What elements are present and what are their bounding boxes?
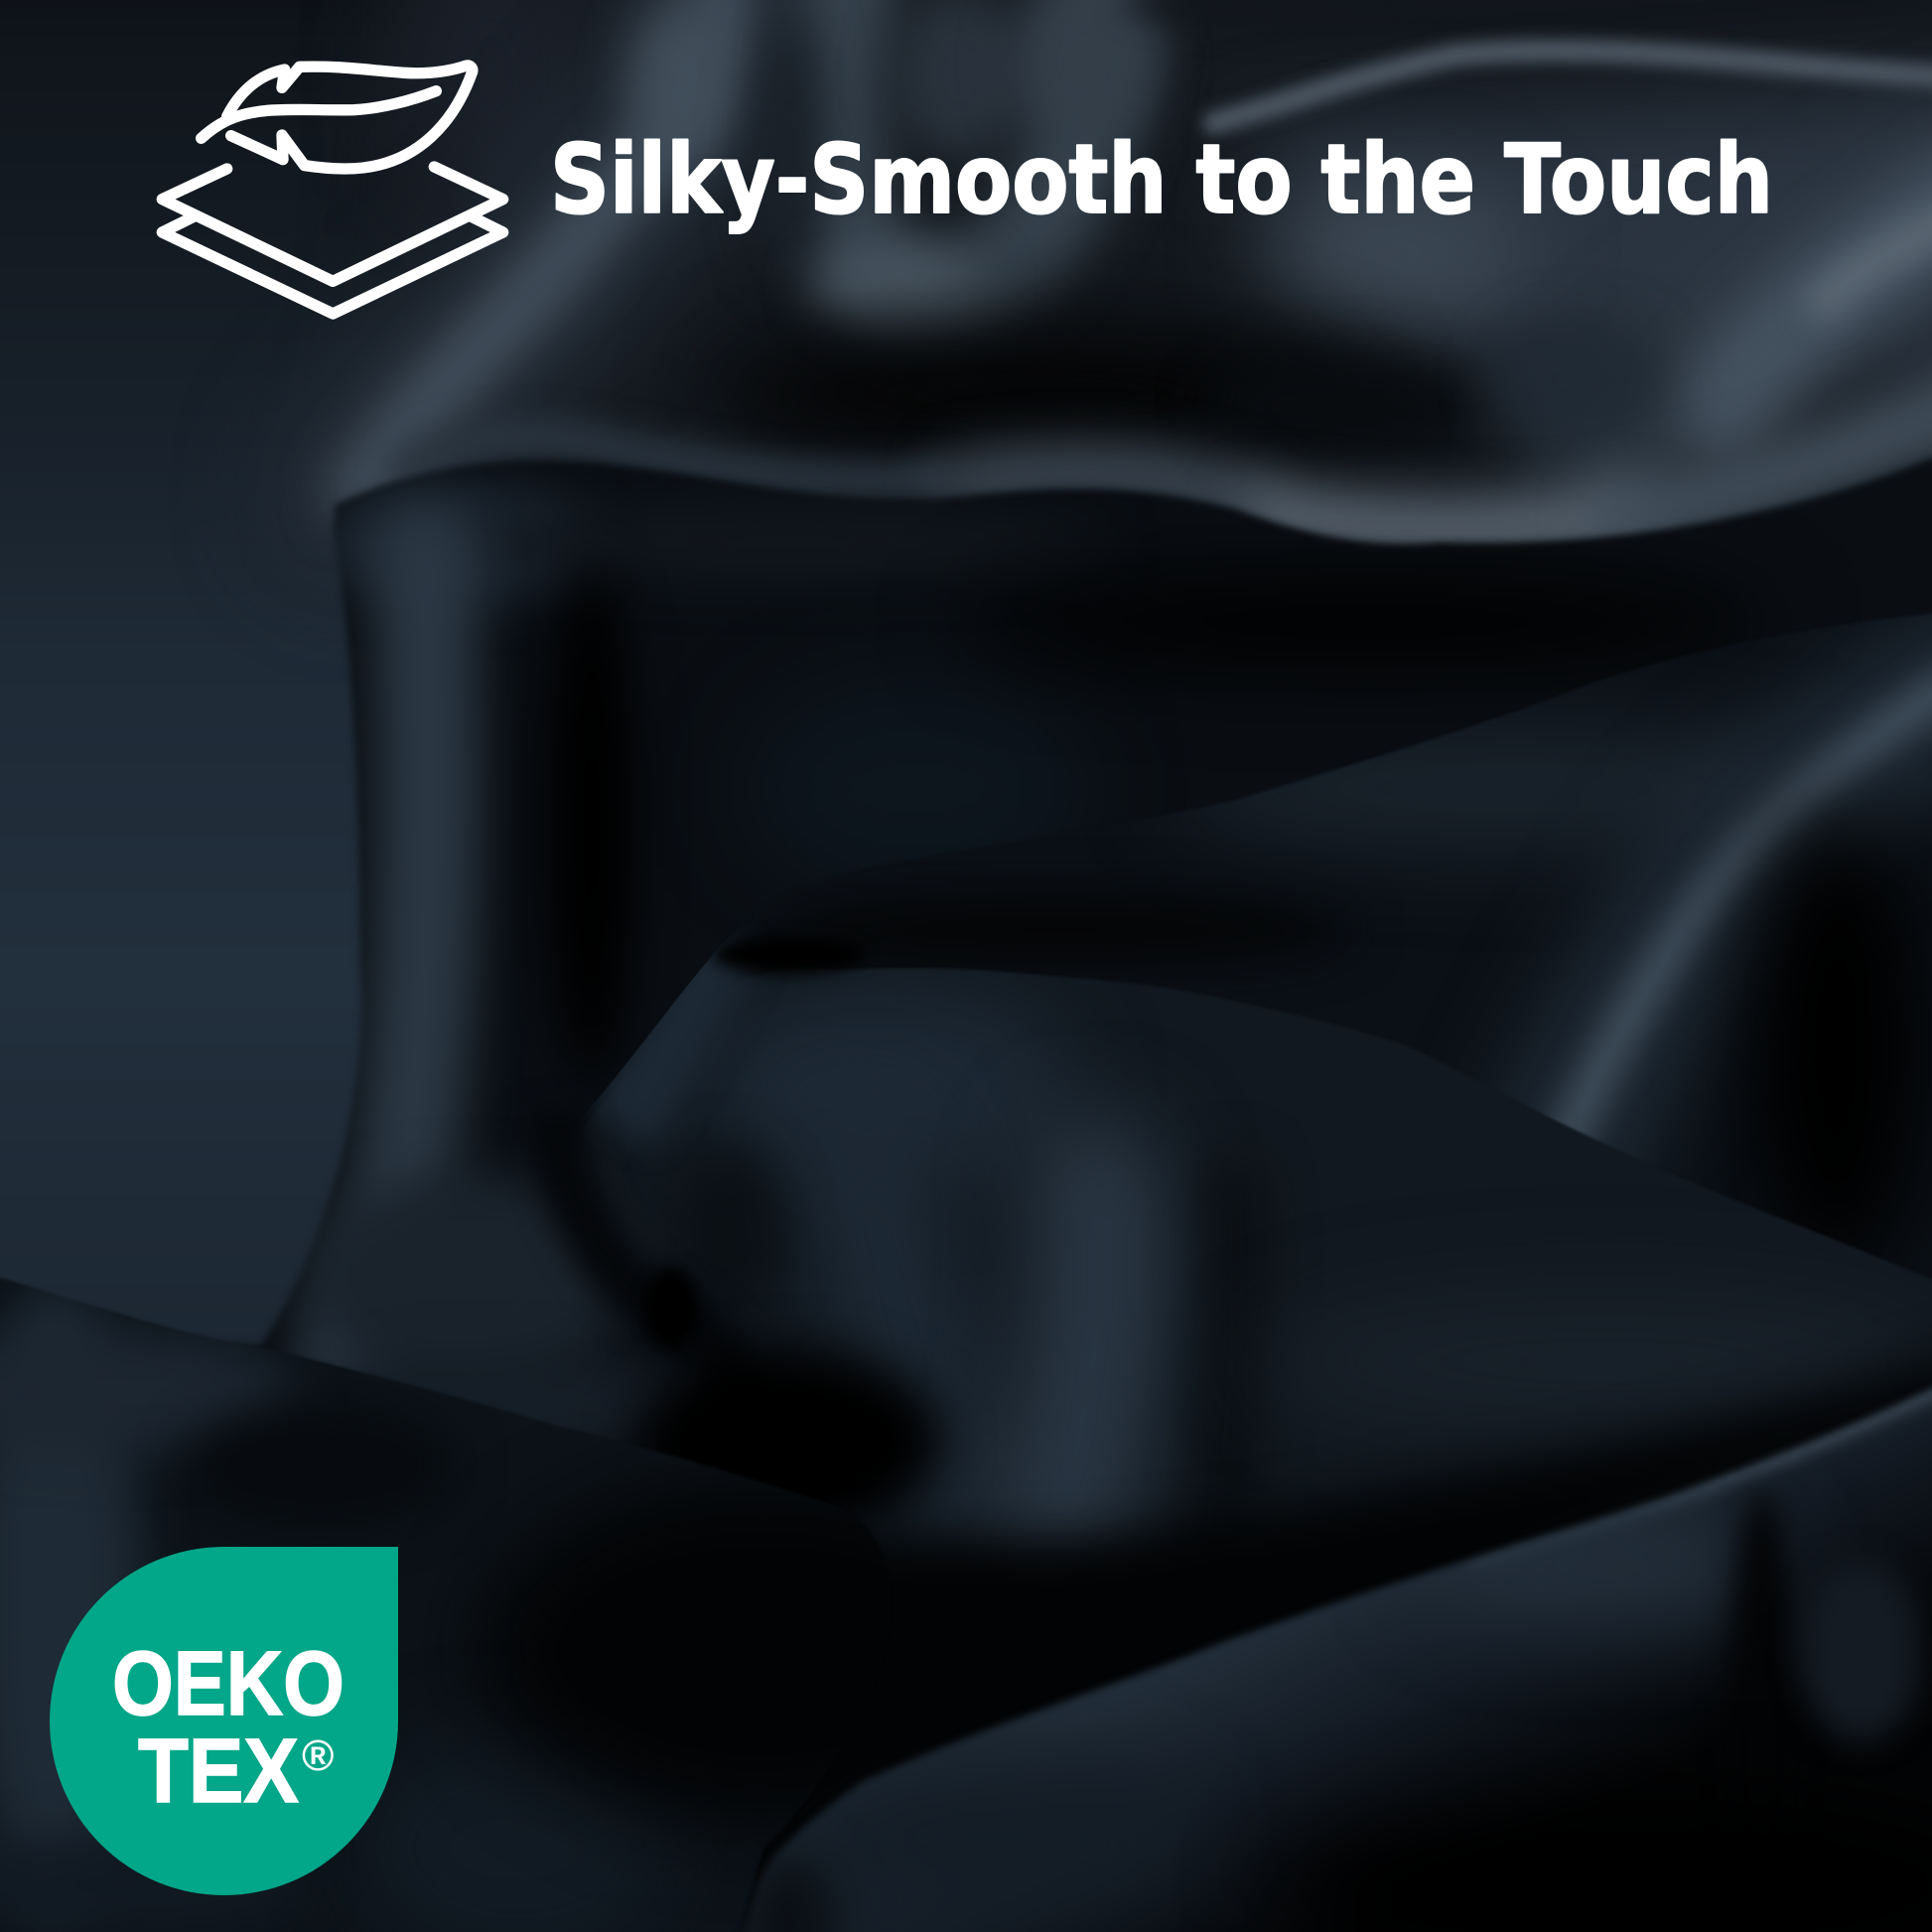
fold: lower right lit surface: [727, 1355, 1932, 1932]
icon part: feather spine: [202, 91, 436, 138]
fold: large upper lobe: [243, 456, 1932, 1446]
fold: central twist: [542, 961, 1932, 1932]
icon part: feather outline: [227, 66, 473, 169]
title: Silky-Smooth to the Touch: [550, 124, 1773, 235]
left slate panel of fabric: [0, 0, 444, 1392]
icon part: bottom layer sheet: [162, 216, 503, 314]
badge text: TEX: TEX: [138, 1721, 299, 1822]
fold: middle ridge surface: [824, 614, 1932, 1249]
upper folds and sheens: [321, 0, 1932, 528]
shadow: black pit of the twist: [634, 1349, 942, 1534]
shadow: deep black crease in lower centre: [469, 1349, 1932, 1932]
icon part: top layer sheet: [162, 167, 503, 281]
badge shape: [50, 1547, 398, 1895]
badge text: registered mark: ®: [302, 1731, 334, 1780]
flank of the ridge blending into the twist: [622, 936, 865, 1128]
icon: feather over stacked layers: [162, 66, 503, 314]
fold: lower left drape: [0, 1277, 876, 1932]
badge: OEKO-TEX: [50, 1547, 398, 1895]
badge text: OEKO: OEKO: [112, 1633, 345, 1734]
shadow: crease beside the woven strip: [554, 1109, 763, 1466]
small black pit of the twist: [644, 1267, 699, 1350]
